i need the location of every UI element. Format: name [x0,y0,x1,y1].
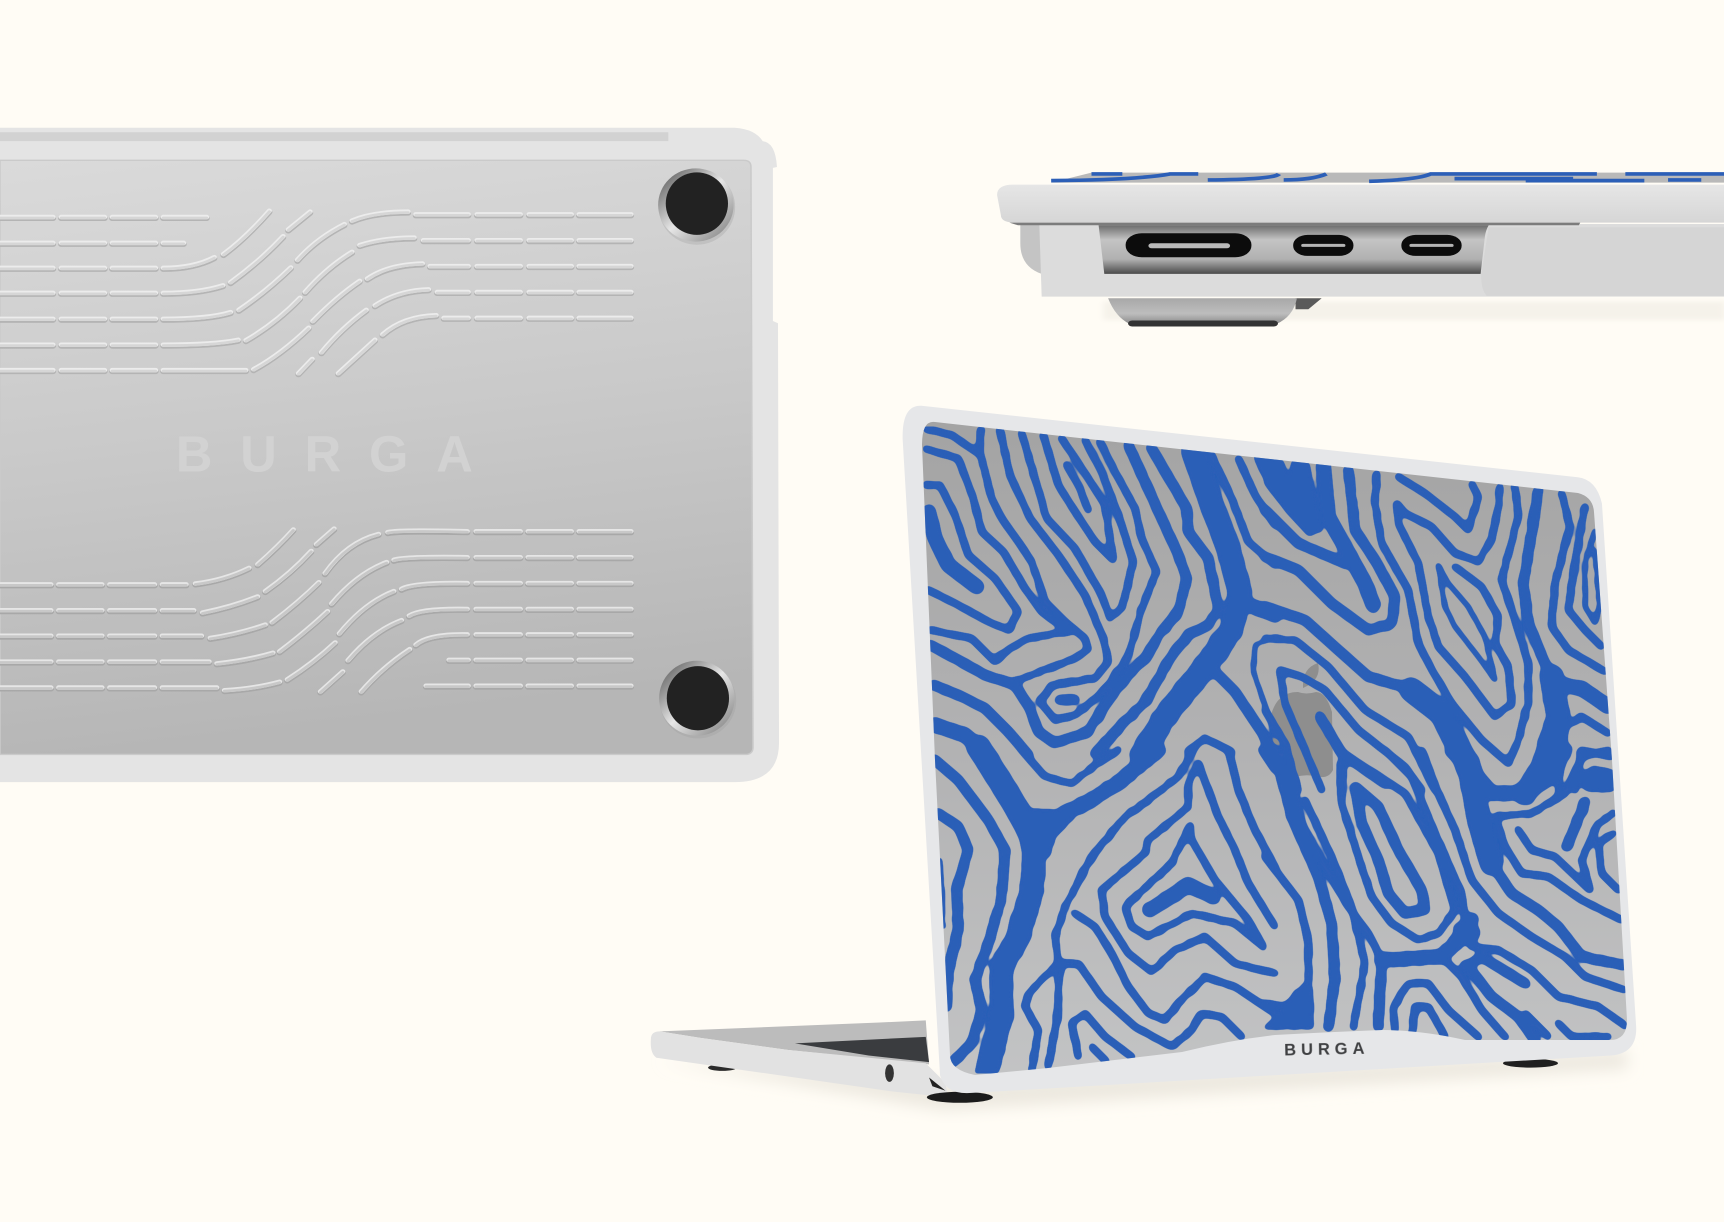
pattern: lower left [935,747,1275,1073]
lid underside shadow [1009,223,1580,225]
hinge shadow [929,1078,946,1091]
shadow under open laptop [660,1050,1627,1110]
laptop lid case [900,406,1640,1103]
logo: BURGA on lid: BURGA [1284,1040,1365,1059]
pattern: upper right [1265,458,1612,793]
side port [885,1064,894,1082]
pattern: lower right [1265,750,1627,1040]
frame [903,406,1636,1093]
hinge line [0,132,668,141]
soft shadow [1103,302,1724,320]
marble line pattern [923,427,1627,1073]
base top surface [660,1020,929,1064]
base frame [651,1031,948,1097]
upper vent pattern [0,211,631,375]
MagSafe port [1126,233,1251,257]
case frame [0,128,779,782]
rubber feet on base [708,1064,737,1071]
panel: side view with ports [997,173,1724,327]
pattern: upper left [923,427,1277,758]
keyboard [795,1037,929,1062]
panel: underside of case [0,128,779,782]
port cut-out [1099,225,1489,274]
lid pattern edge [1051,173,1724,183]
rubber foot left [927,1092,993,1103]
foot [1108,298,1322,327]
logo: BURGA embossed: BURGA [176,426,473,483]
rubber foot: bottom [659,661,736,738]
rubber foot: top [658,168,735,245]
right body highlight [1481,227,1724,296]
body of case [1039,224,1724,297]
screen back [900,410,1640,1090]
apple logo [1269,663,1333,777]
rear hinge [1020,225,1042,274]
laptop base [651,1020,948,1097]
lower vent pattern [0,529,631,693]
USB-C port 1 [1293,235,1353,256]
USB-C port 2 [1401,235,1462,256]
frosted base plate [0,160,753,754]
lid [997,185,1724,223]
rubber foot right [1503,1059,1558,1068]
